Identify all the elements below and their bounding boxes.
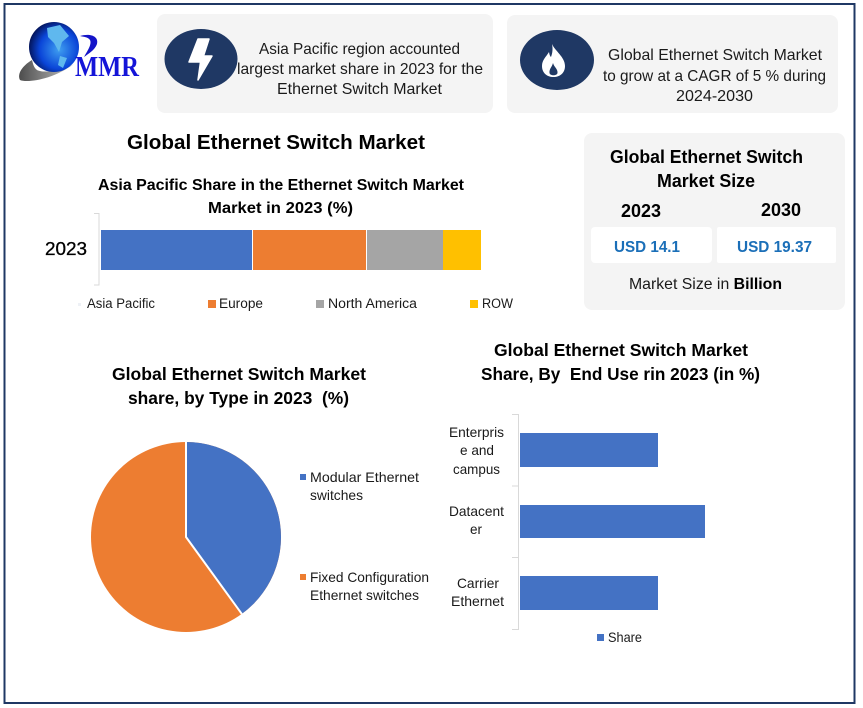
stat: 2023: USD 14.1 [614,239,680,256]
callout text: CAGR: to grow at a CAGR of 5 % during [603,68,826,85]
legend: stacked bar chart: Europe [219,296,263,311]
pie chart [91,442,281,632]
icon: flame [520,30,594,90]
heading: stacked bar chart: Asia Pacific Share in the Ethernet Switch Market [98,177,465,194]
legend: stacked bar chart: North America [328,296,418,311]
stat: 2030: 2030 [761,200,801,220]
axis labels: end use: Ethernet [451,593,504,609]
axis labels: end use: er [470,521,482,537]
callout text: Asia Pacific: Asia Pacific region accounted [259,41,460,58]
legend: pie chart: Fixed Configuration [310,569,429,585]
heading: pie chart: share, by Type in 2023 (%) [128,388,349,408]
legend: pie chart: Ethernet switches [310,587,419,603]
logo: MMR globe: MMR [75,52,140,83]
legend: pie chart: switches [310,487,363,503]
callout text: Asia Pacific [237,41,483,98]
axis labels: end use: Datacent [449,503,504,519]
title: Global Ethernet Switch Market [127,132,425,154]
heading: market size: Market Size [657,171,755,191]
callout text: CAGR: Global Ethernet Switch Market [608,47,823,64]
axis labels: end use: Enterpris [449,424,504,440]
heading: market size: Global Ethernet Switch [610,147,803,167]
heading: bar chart: Global Ethernet Switch Market [494,340,748,360]
stat: 2023 [591,201,712,263]
axis labels: end use [449,424,504,609]
legend: stacked bar chart: Asia Pacific [87,296,155,311]
heading: bar chart [481,340,760,384]
heading: bar chart: Share, By End Use rin 2023 (in %) [481,364,760,384]
axis labels: end use: e and [460,442,494,458]
legend: pie chart: Modular Ethernet [310,469,419,485]
stat: 2030: USD 19.37 [737,239,812,256]
heading: market size [610,147,803,191]
legend: bar chart: Share [608,629,642,645]
legend: stacked bar chart: ROW [482,296,513,311]
callout text: CAGR [603,47,826,105]
stacked bar chart [45,214,481,285]
bar chart [449,414,705,630]
legend: stacked bar chart [78,296,513,311]
callout text: CAGR: 2024-2030 [676,88,753,105]
axis labels: end use: campus [453,461,500,477]
callout text: Asia Pacific: Ethernet Switch Market [277,81,443,98]
panel: market size [584,133,845,310]
stat: 2023: 2023 [621,201,661,221]
logo: MMR globe [19,22,140,83]
legend: pie chart [300,469,429,603]
axis labels: end use: Carrier [457,575,499,591]
heading: pie chart [112,364,366,408]
note: market size unit: Market Size in Billion [629,276,782,293]
heading: stacked bar chart: Market in 2023 (%) [208,200,353,217]
icon: lightning bolt [164,29,238,89]
stacked bar chart: 2023 [45,239,87,259]
heading: pie chart: Global Ethernet Switch Market [112,364,366,384]
stat: 2030 [717,200,836,263]
callout text: Asia Pacific: largest market share in 2023 for the [237,61,483,78]
heading: stacked bar chart [98,177,465,217]
panel: CAGR callout [507,15,838,113]
panel: Asia Pacific callout [157,14,493,113]
